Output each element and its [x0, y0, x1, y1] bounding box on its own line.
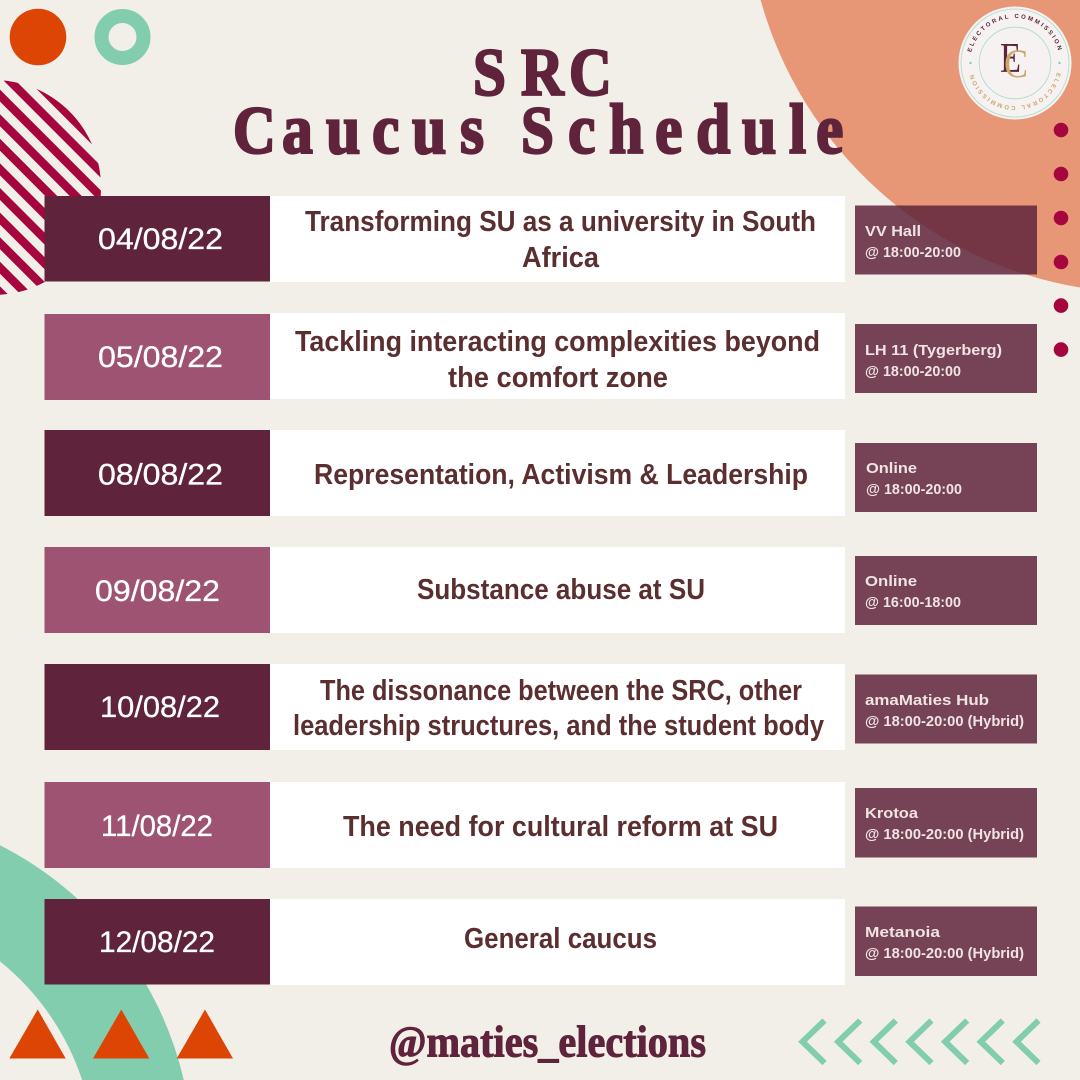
striped circle left [0, 80, 101, 295]
row 3: 08/08/22: Online [866, 460, 917, 477]
logo: electoral commission seal: C [1004, 41, 1028, 86]
logo: electoral commission seal [958, 6, 1072, 120]
row 4: 09/08/22: 09/08/22 [95, 575, 220, 608]
row 4: 09/08/22 [44, 547, 1037, 633]
icon: green chevrons [802, 1020, 1038, 1063]
row 6: 11/08/22: 11/08/22 [101, 810, 213, 843]
title: chedule [568, 91, 843, 169]
logo: electoral commission seal: E [1000, 36, 1021, 82]
row 1: 04/08/22 [44, 196, 1037, 282]
row 7: 12/08/22: 12/08/22 [99, 926, 215, 959]
row 6: 11/08/22: @ 18:00-20:00 (Hybrid) [865, 826, 1024, 843]
logo: electoral commission seal: ELECTORAL COMMISSION [970, 72, 1061, 110]
title: SRC [473, 34, 612, 110]
row 7: 12/08/22: Metanoia [865, 924, 941, 941]
title: C [233, 92, 276, 168]
icon: three orange triangles [9, 1010, 233, 1058]
row 5: 10/08/22: leadership structures, and the student body [293, 710, 824, 742]
row 3: 08/08/22: @ 18:00-20:00 [866, 481, 962, 498]
row 6: 11/08/22: The need for cultural reform at SU [343, 811, 778, 843]
row 7: 12/08/22: @ 18:00-20:00 (Hybrid) [865, 945, 1024, 962]
decorative dots column [1054, 123, 1068, 357]
row 1: 04/08/22: 04/08/22 [98, 223, 223, 256]
social handle: @maties_elections [389, 1018, 706, 1066]
row 5: 10/08/22: The dissonance between the SRC, other [320, 675, 802, 707]
icon: orange circle [10, 9, 66, 65]
row 7: 12/08/22: General caucus [464, 923, 657, 955]
row 5: 10/08/22 [44, 664, 1037, 750]
row 2: 05/08/22: LH 11 (Tygerberg) [865, 342, 1002, 359]
row 6: 11/08/22 [44, 782, 1037, 868]
row 5: 10/08/22: amaMaties Hub [865, 692, 989, 709]
row 4: 09/08/22: Substance abuse at SU [417, 574, 705, 606]
row 3: 08/08/22: Representation, Activism & Leadership [314, 459, 808, 491]
row 2: 05/08/22: @ 18:00-20:00 [865, 363, 961, 380]
row 2: 05/08/22: 05/08/22 [98, 341, 223, 374]
row 5: 10/08/22: @ 18:00-20:00 (Hybrid) [865, 713, 1024, 730]
row 3: 08/08/22 [44, 430, 1037, 516]
row 7: 12/08/22 [44, 899, 1037, 985]
row 6: 11/08/22: Krotoa [865, 805, 919, 822]
row 3: 08/08/22: 08/08/22 [98, 458, 223, 492]
row 2: 05/08/22 [44, 313, 1037, 400]
logo: electoral commission seal: ELECTORAL COMMISSION [967, 14, 1062, 52]
row 1: 04/08/22: @ 18:00-20:00 [865, 244, 961, 261]
green arc bottom left [0, 845, 184, 1080]
row 4: 09/08/22: Online [865, 573, 917, 590]
peach circle top right [761, 0, 1080, 288]
row 1: 04/08/22: Africa [522, 242, 600, 274]
title [233, 34, 843, 169]
title: S [521, 92, 554, 168]
row 2: 05/08/22: the comfort zone [448, 362, 668, 394]
row 1: 04/08/22: VV Hall [865, 223, 921, 240]
row 4: 09/08/22: @ 16:00-18:00 [865, 594, 961, 611]
icon: green ring [102, 16, 144, 58]
row 5: 10/08/22: 10/08/22 [100, 691, 220, 724]
title: aucus [282, 91, 499, 169]
row 1: 04/08/22: Transforming SU as a university in South [305, 206, 816, 238]
row 2: 05/08/22: Tackling interacting complexities beyond [295, 326, 820, 358]
